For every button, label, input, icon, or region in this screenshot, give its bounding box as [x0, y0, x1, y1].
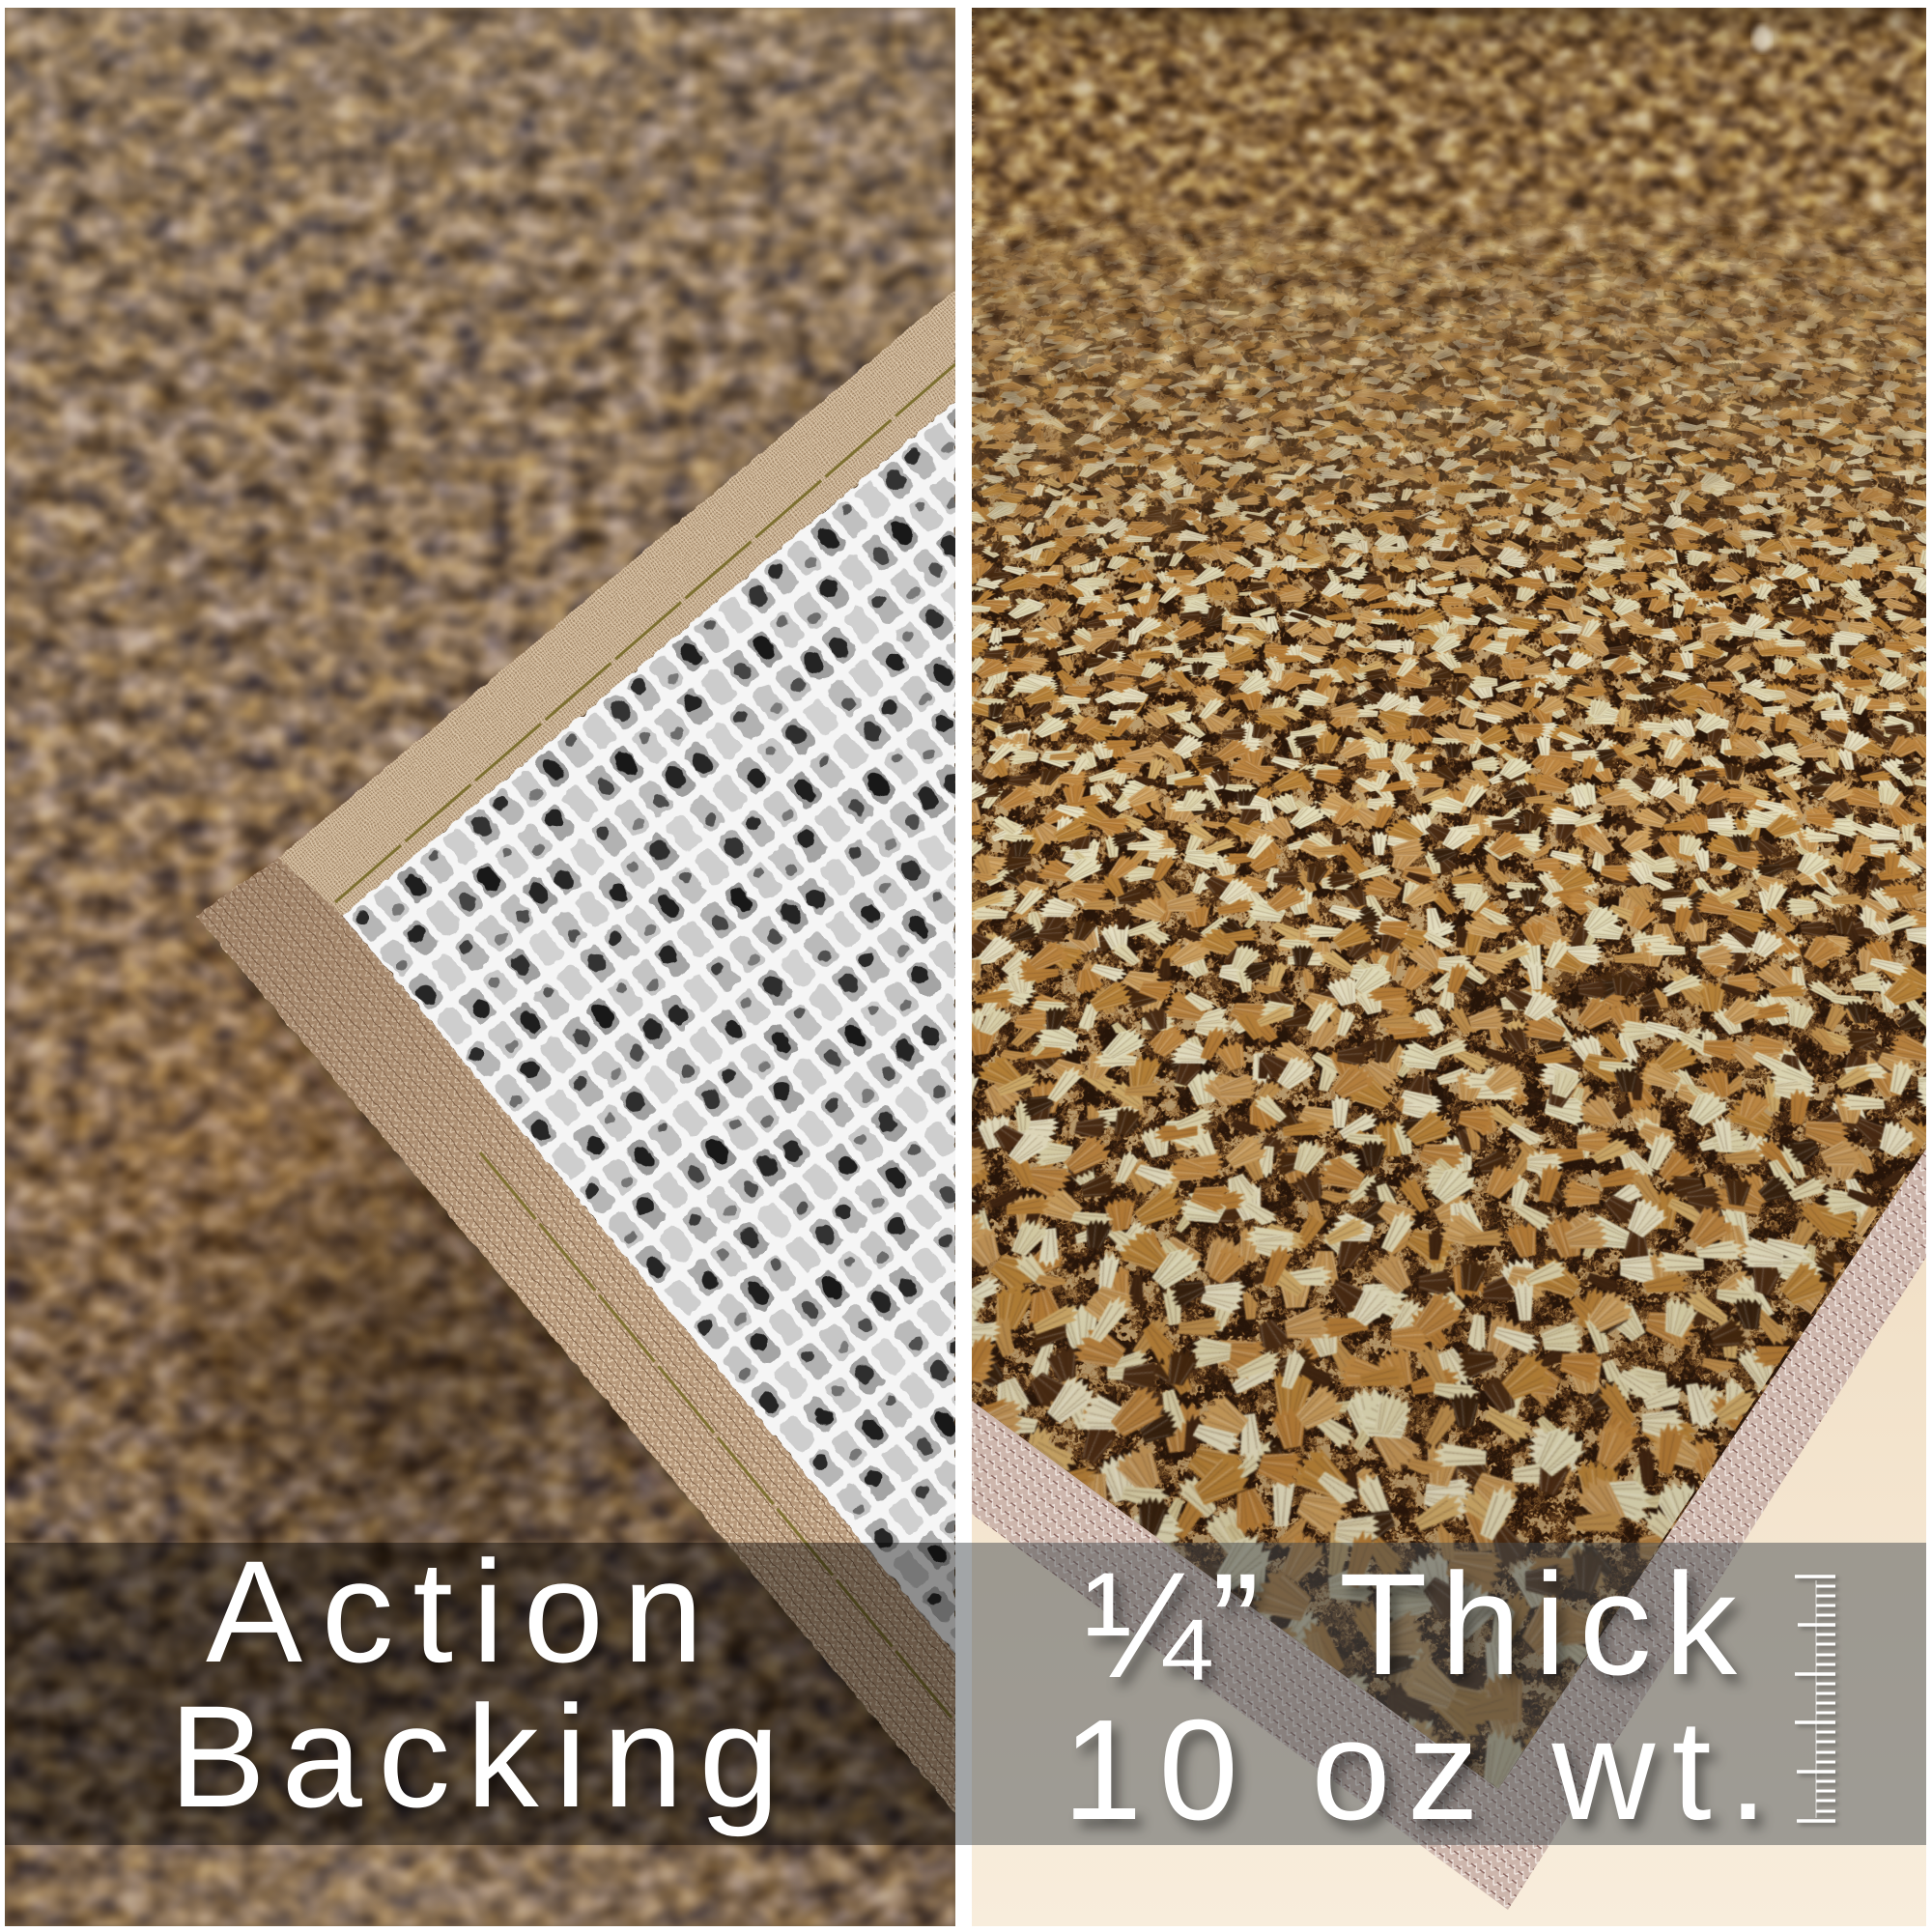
shag out-of-focus top area — [972, 0, 1932, 1797]
panel: action backing photo — [0, 8, 966, 1932]
pink binding border — [972, 1130, 1932, 1910]
caption: action backing: Action — [206, 1530, 703, 1692]
icon: thickness ruler — [1795, 1577, 1835, 1821]
shag base shadows — [972, 0, 1932, 1797]
caption: thickness and weight — [1063, 1542, 1768, 1850]
caption: thickness and weight: ” — [1211, 1543, 1260, 1705]
lower binding strip — [196, 858, 955, 1813]
caption: action backing: Backing — [169, 1675, 780, 1837]
rug corner turned over — [196, 290, 966, 1835]
blurred carpet pile — [0, 8, 955, 1932]
upper binding strip — [278, 290, 955, 916]
caption: thickness and weight: Thick — [1339, 1543, 1738, 1705]
caption: thickness and weight: 10 oz wt. — [1063, 1690, 1768, 1850]
stitching — [335, 364, 955, 1722]
caption: thickness and weight: ¼ — [1084, 1542, 1211, 1710]
mesh action backing — [343, 401, 955, 1655]
caption: action backing — [169, 1530, 780, 1837]
cream floor background — [972, 8, 1926, 1926]
panel: shag pile photo base — [972, 0, 1932, 1926]
translucent caption band — [5, 1543, 1926, 1845]
